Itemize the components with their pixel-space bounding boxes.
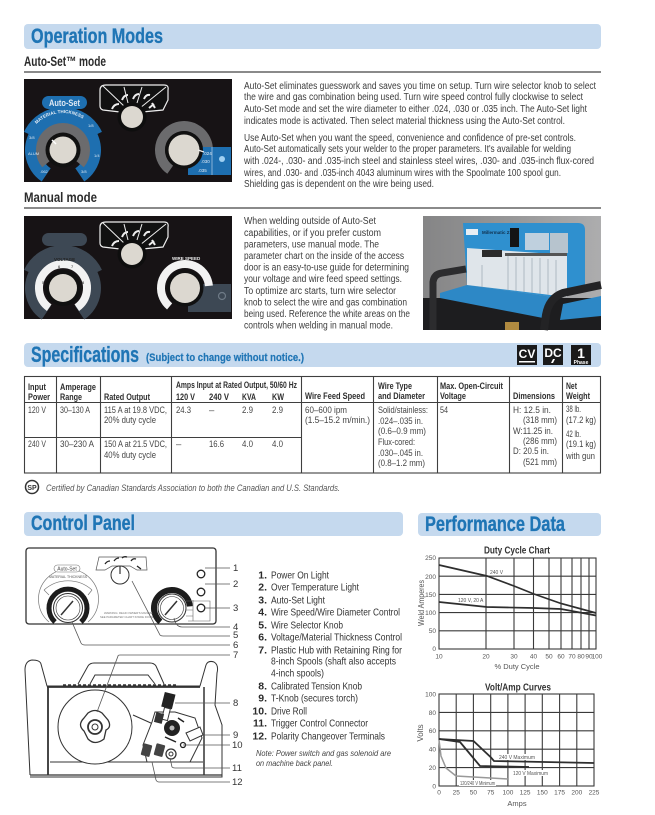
dial: voltage: VOLTAGE [54, 257, 75, 262]
series labels [459, 754, 549, 787]
dial: wire selector [100, 222, 168, 268]
table body rows: (318 mm) [523, 415, 557, 426]
table header row: Dimensions [513, 391, 555, 402]
y axis: 150 [425, 592, 436, 599]
table body rows: Flux-cored: [378, 437, 415, 448]
series: 240 V [439, 565, 596, 613]
dial: material thickness: Auto-Set [49, 98, 80, 108]
table header row: Power [28, 392, 50, 403]
x axis: 100 [502, 790, 514, 796]
list: control panel legend: Polarity Changeover Terminals [271, 730, 385, 742]
y axis: 0 [432, 784, 436, 790]
dial: wire speed and diameter: .030 [201, 159, 210, 164]
table header row: Max. Open-Circuit [440, 381, 504, 392]
table header row: KVA [242, 392, 256, 403]
list: control panel legend: Voltage/Material Thickness Control [271, 632, 402, 644]
list: control panel legend: 8-inch Spools (shaft also accepts [271, 656, 396, 668]
list: control panel legend: 11. [253, 718, 267, 730]
x axis [435, 654, 603, 671]
table body rows: 60–600 ipm [305, 405, 347, 416]
callout numbers: 4 [233, 622, 238, 633]
machine outline [25, 660, 222, 777]
table body rows: 54 [440, 405, 448, 416]
callout numbers: 2 [233, 579, 238, 590]
heading: Auto-Set mode: Auto-Set™ mode [24, 54, 106, 69]
list: control panel legend: 9. [258, 692, 267, 704]
text block: Manual mode description: door is an easy-to-use guide for determining [244, 262, 409, 274]
panel: Auto-Set control dials photo [24, 79, 232, 182]
y axis: 250 [425, 555, 436, 562]
table body rows: 240 V [28, 439, 46, 450]
callout numbers: 6 [233, 640, 238, 651]
series: 240 V maximum [439, 739, 594, 763]
table header row: Rated Output [104, 392, 151, 403]
table header row: 240 V [209, 392, 230, 403]
text block: Manual mode description: parameter chart on the inside of the access [244, 251, 404, 262]
list: control panel legend: Calibrated Tension Knob [271, 680, 362, 692]
x axis: 200 [571, 790, 583, 796]
table header row: and Diameter [378, 391, 425, 402]
note: back panel: Note: Power switch and gas solenoid are [256, 748, 391, 758]
list: control panel legend: T-Knob (secures torch) [271, 692, 358, 704]
y axis: Weld Amperes [417, 580, 426, 626]
dial: wire speed and diameter: .035 [198, 168, 207, 173]
y axis [417, 555, 436, 653]
x axis: 175 [554, 790, 565, 796]
table body rows: (521 mm) [523, 457, 557, 468]
table body rows: 2.9 [242, 405, 253, 416]
table header row: 120 V [176, 392, 196, 403]
x axis: 70 [568, 654, 576, 660]
heading: Manual mode: Manual mode [24, 190, 97, 205]
icon: 1 Phase: 1 [577, 345, 585, 361]
section: Performance Data heading: Performance Data [425, 513, 565, 536]
section: Specifications heading: Specifications [31, 342, 139, 367]
dial: wire speed [161, 256, 231, 312]
table header row: Amperage [60, 382, 96, 393]
list: control panel legend: Trigger Control Connector [271, 718, 368, 730]
series labels: 120 V, 20 A [458, 598, 484, 604]
series: 120 V, 20 A [439, 602, 596, 616]
callout leader lines [72, 568, 230, 782]
icon: DC: DC [544, 346, 562, 360]
text block: Manual mode description: To optimize arc starts, turn wire selector [244, 286, 397, 297]
dial: wire speed and diameter [160, 126, 231, 175]
table body rows: 20% duty cycle [104, 415, 156, 426]
table body rows: 150 A at 21.5 VDC, [104, 439, 167, 450]
text block: Manual mode description: parameters, use manual mode. The [244, 240, 379, 250]
list: control panel legend: 10. [252, 706, 267, 718]
dial: material thickness: 3/8 [29, 135, 35, 140]
dial: wire selector [100, 85, 168, 132]
text block: Manual mode description [244, 216, 410, 332]
text block: Auto-Set description: with .024-, .030- and .035-inch steel and stainless steel wires, .030- and .035-inch flux-cored [243, 156, 594, 167]
text block: Manual mode description: being used. Reference the white areas on the [244, 309, 410, 320]
section: Control Panel heading [24, 512, 403, 536]
callout numbers [232, 563, 243, 788]
text block: Manual mode description: When welding outside of Auto-Set [244, 216, 376, 227]
table body rows: (17.2 kg) [566, 415, 596, 426]
text block: Auto-Set description: the wire and gas combination being used. Turn wire speed control fully clockwise to select [244, 92, 583, 103]
photo: welder access door with parameter chart: Millermatic 211 [482, 230, 515, 235]
x axis: 40 [530, 654, 537, 660]
dial: material thickness: 3/8 [81, 169, 87, 174]
x axis: 50 [470, 790, 477, 796]
chart: Volt/Amp Curves: Volt/Amp Curves [485, 682, 551, 694]
series labels [458, 570, 504, 604]
icon: CV [517, 345, 537, 365]
dial: material thickness [24, 96, 102, 182]
icon: DC [543, 345, 563, 365]
text block: Manual mode description: controls when welding in manual mode. [244, 320, 393, 332]
x axis: 125 [520, 790, 531, 796]
certification note with CSA mark: Certified by Canadian Standards Association to both the Canadian and U.S. Standards. [46, 483, 340, 493]
table body rows: – [176, 439, 182, 450]
table body rows [28, 404, 596, 469]
table body rows: with gun [565, 451, 595, 462]
icon: 1 Phase: Phase [574, 360, 589, 366]
list: control panel legend: Auto-Set Light [271, 594, 325, 606]
x axis: 10 [435, 654, 443, 660]
indicator lights [197, 570, 205, 612]
x axis: 25 [453, 790, 460, 796]
callout numbers: 1 [233, 563, 238, 574]
section: Operation Modes heading: Operation Modes [31, 25, 163, 48]
photo: welder access door with parameter chart [423, 216, 601, 330]
callout numbers: 8 [233, 698, 238, 709]
table body rows: 120 V [28, 405, 46, 416]
text block: Auto-Set description: Use Auto-Set when you want the speed, convenience and confidence of pre-set controls. [244, 133, 576, 144]
panel: Manual control dials photo [24, 216, 232, 319]
icon: 1 Phase [571, 345, 591, 366]
x axis: 225 [589, 790, 600, 796]
table body rows: 16.6 [209, 439, 224, 450]
table body rows: (0.6–0.9 mm) [378, 426, 426, 437]
centre selector drawing [96, 557, 147, 584]
callout numbers: 9 [233, 730, 238, 741]
drive assembly [133, 692, 203, 762]
table body rows: 40% duty cycle [104, 450, 156, 461]
x axis [437, 790, 600, 808]
table body rows: 4.0 [242, 439, 253, 450]
table header row: Range [60, 392, 82, 403]
y axis: 50 [429, 628, 436, 635]
callout numbers: 5 [233, 630, 238, 641]
list: control panel legend: 4-inch spools) [271, 668, 324, 680]
diagram: control panel front: WARNING: READ OWNER'S MANUAL [104, 611, 154, 615]
table body rows: – [209, 405, 215, 416]
table body rows: Solid/stainless: [378, 405, 428, 416]
table body rows: 30–130 A [60, 405, 90, 416]
y axis [416, 692, 436, 790]
section: Specifications heading: (Subject to change without notice.) [146, 352, 304, 364]
table header row: Weight [566, 391, 591, 402]
callout numbers: 12 [232, 777, 243, 788]
list: control panel legend: Over Temperature Light [271, 582, 359, 594]
x axis: 60 [557, 654, 565, 660]
certification note with CSA mark: SP [27, 485, 37, 492]
table header row: Input [28, 382, 47, 393]
section: Control Panel heading: Control Panel [31, 512, 135, 535]
text block: Manual mode description: knob to select the wire and gas combination [244, 298, 407, 308]
x axis: Amps [507, 799, 527, 808]
y axis: 60 [429, 728, 436, 735]
chart: Duty Cycle Chart [417, 546, 603, 671]
text block: Manual mode description: capabilities, or if you prefer custom [244, 228, 381, 239]
x axis: 75 [487, 790, 495, 796]
text block: Auto-Set description: Auto-Set eliminates guesswork and saves you time on setup. Turn wire selector knob to select [244, 81, 596, 92]
series: 120 V maximum [439, 739, 529, 767]
dial: voltage: 6 [58, 264, 61, 269]
table body rows: D: 20.5 in. [513, 446, 549, 457]
table body rows: (19.1 kg) [566, 439, 596, 450]
left voltage dial drawing: Auto-Set [57, 566, 77, 572]
x axis: 0 [437, 790, 441, 796]
table body rows: .024–.035 in. [378, 416, 423, 427]
list: control panel legend: Wire Selector Knob [271, 620, 343, 632]
table: specifications [24, 376, 601, 473]
table body rows: 2.9 [272, 405, 283, 416]
table header row: Voltage [440, 391, 466, 402]
left voltage dial drawing: MATERIAL THICKNESS [49, 575, 88, 579]
left voltage dial drawing [38, 565, 98, 622]
section: Operation Modes heading [24, 24, 601, 49]
dial: wire speed and diameter: .024 [203, 151, 212, 156]
text block: Auto-Set description: Auto-Set mode and set the wire diameter to either .024, .030 or .035 inch. The Auto-Set light [244, 104, 587, 115]
list: control panel legend: 5. [258, 620, 267, 632]
table body rows: (286 mm) [523, 436, 557, 447]
dial: material thickness: .062 [40, 169, 49, 174]
list: control panel legend [252, 570, 402, 742]
text block: Auto-Set description: indicates mode is activated. Then select material thickness using the Auto-Set control. [244, 116, 565, 127]
text block: Manual mode description: your voltage and wire feed speed settings. [244, 274, 402, 285]
dial: voltage: 5 [42, 280, 45, 285]
series labels: 240 V [490, 570, 504, 576]
list: control panel legend: Drive Roll [271, 706, 307, 718]
note: back panel: on machine back panel. [256, 758, 333, 768]
series labels: 120 V Maximum [513, 771, 548, 777]
callout numbers: 3 [233, 603, 238, 614]
icon: CV: CV [519, 347, 535, 361]
list: control panel legend: 12. [252, 730, 267, 742]
x axis: 30 [510, 654, 518, 660]
table body rows: 24.3 [176, 405, 191, 416]
section: Specifications heading [24, 342, 601, 367]
x axis: 150 [537, 790, 548, 796]
note: back panel [256, 748, 391, 768]
list: control panel legend: Plastic Hub with Retaining Ring for [271, 644, 402, 656]
dial: material thickness: 1/4 [94, 153, 100, 158]
table body rows: 115 A at 19.8 VDC, [104, 405, 167, 416]
y axis: 40 [429, 746, 436, 754]
table body rows: W:11.25 in. [513, 426, 553, 437]
list: control panel legend: 8. [258, 680, 267, 692]
table body rows: 38 lb. [566, 404, 581, 415]
wire spool and hub [58, 690, 132, 764]
x axis: 20 [482, 654, 490, 660]
table body rows: (0.8–1.2 mm) [378, 458, 425, 469]
diagram: control panel front [26, 548, 216, 624]
series: 120/240 V minimum [439, 740, 508, 779]
table header row: KW [272, 392, 284, 403]
dial: voltage: 7 [71, 264, 74, 269]
chart: Volt/Amp Curves [416, 682, 600, 808]
table body rows: 4.0 [272, 439, 283, 450]
x axis: 50 [545, 654, 553, 660]
y axis: 100 [425, 692, 436, 698]
y axis: 0 [432, 646, 436, 653]
certification note with CSA mark [26, 480, 340, 494]
table body rows: (1.5–15.2 m/min.) [305, 415, 370, 426]
y axis: Volts [416, 724, 425, 742]
dial: voltage [30, 233, 96, 313]
y axis: 20 [429, 765, 436, 772]
list: control panel legend: 7. [258, 644, 267, 656]
list: control panel legend: 4. [258, 606, 267, 618]
text block: Auto-Set description: Auto-Set automatically sets your welder to the proper parameters. It's available for welding [244, 144, 571, 155]
text block: Auto-Set description: Shielding gas is dependent on the wire being used. [244, 179, 434, 190]
dial: material thickness: 1/8 [88, 123, 94, 128]
x axis: 100 [592, 654, 603, 660]
list: control panel legend: 6. [258, 632, 267, 644]
dial: material thickness: MATERIAL THICKNESS [34, 110, 84, 124]
dial: wire speed: WIRE SPEED [172, 256, 201, 261]
list: control panel legend: 1. [258, 570, 267, 582]
table body rows: .030–.045 in. [378, 448, 423, 459]
table header row: Wire Feed Speed [305, 391, 365, 402]
x axis: % Duty Cycle [494, 662, 540, 671]
table header row [28, 380, 591, 403]
list: control panel legend: 2. [258, 582, 267, 594]
list: control panel legend: 3. [258, 594, 267, 606]
x axis: 90 [585, 654, 593, 660]
diagram: control panel front: SEE PARAMETER CHART INSIDE DOOR [100, 615, 153, 619]
text block: Auto-Set description: wires, and .030- and .035-inch 4043 aluminum wires with the Spoolmate 100 spool gun. [243, 168, 561, 179]
x axis: 80 [577, 654, 585, 660]
series labels: 120/240 V Minimum [460, 781, 495, 787]
table body rows: 42 lb. [566, 429, 581, 440]
list: control panel legend: Wire Speed/Wire Diameter Control [271, 606, 400, 618]
right wire speed dial drawing [154, 590, 210, 622]
callout numbers: 11 [232, 763, 242, 774]
y axis: 200 [425, 574, 436, 581]
y axis: 100 [425, 610, 436, 617]
table header row: Net [566, 381, 578, 392]
series labels: 240 V Maximum [499, 755, 535, 761]
dial: voltage: 8 [82, 280, 85, 285]
table header row: Amps Input at Rated Output, 50/60 Hz [176, 380, 297, 391]
text block: Auto-Set description [243, 81, 596, 190]
table body rows: H: 12.5 in. [513, 405, 551, 416]
dial: material thickness: ALUM [28, 151, 39, 156]
chart: Duty Cycle Chart: Duty Cycle Chart [484, 546, 551, 556]
y axis: 80 [429, 710, 436, 717]
table header row: Wire Type [378, 381, 412, 392]
diagram: wire drive compartment [25, 660, 222, 777]
list: control panel legend: Power On Light [271, 570, 329, 582]
table body rows: 30–230 A [60, 439, 95, 450]
callout numbers: 7 [233, 650, 238, 661]
callout numbers: 10 [232, 740, 243, 751]
